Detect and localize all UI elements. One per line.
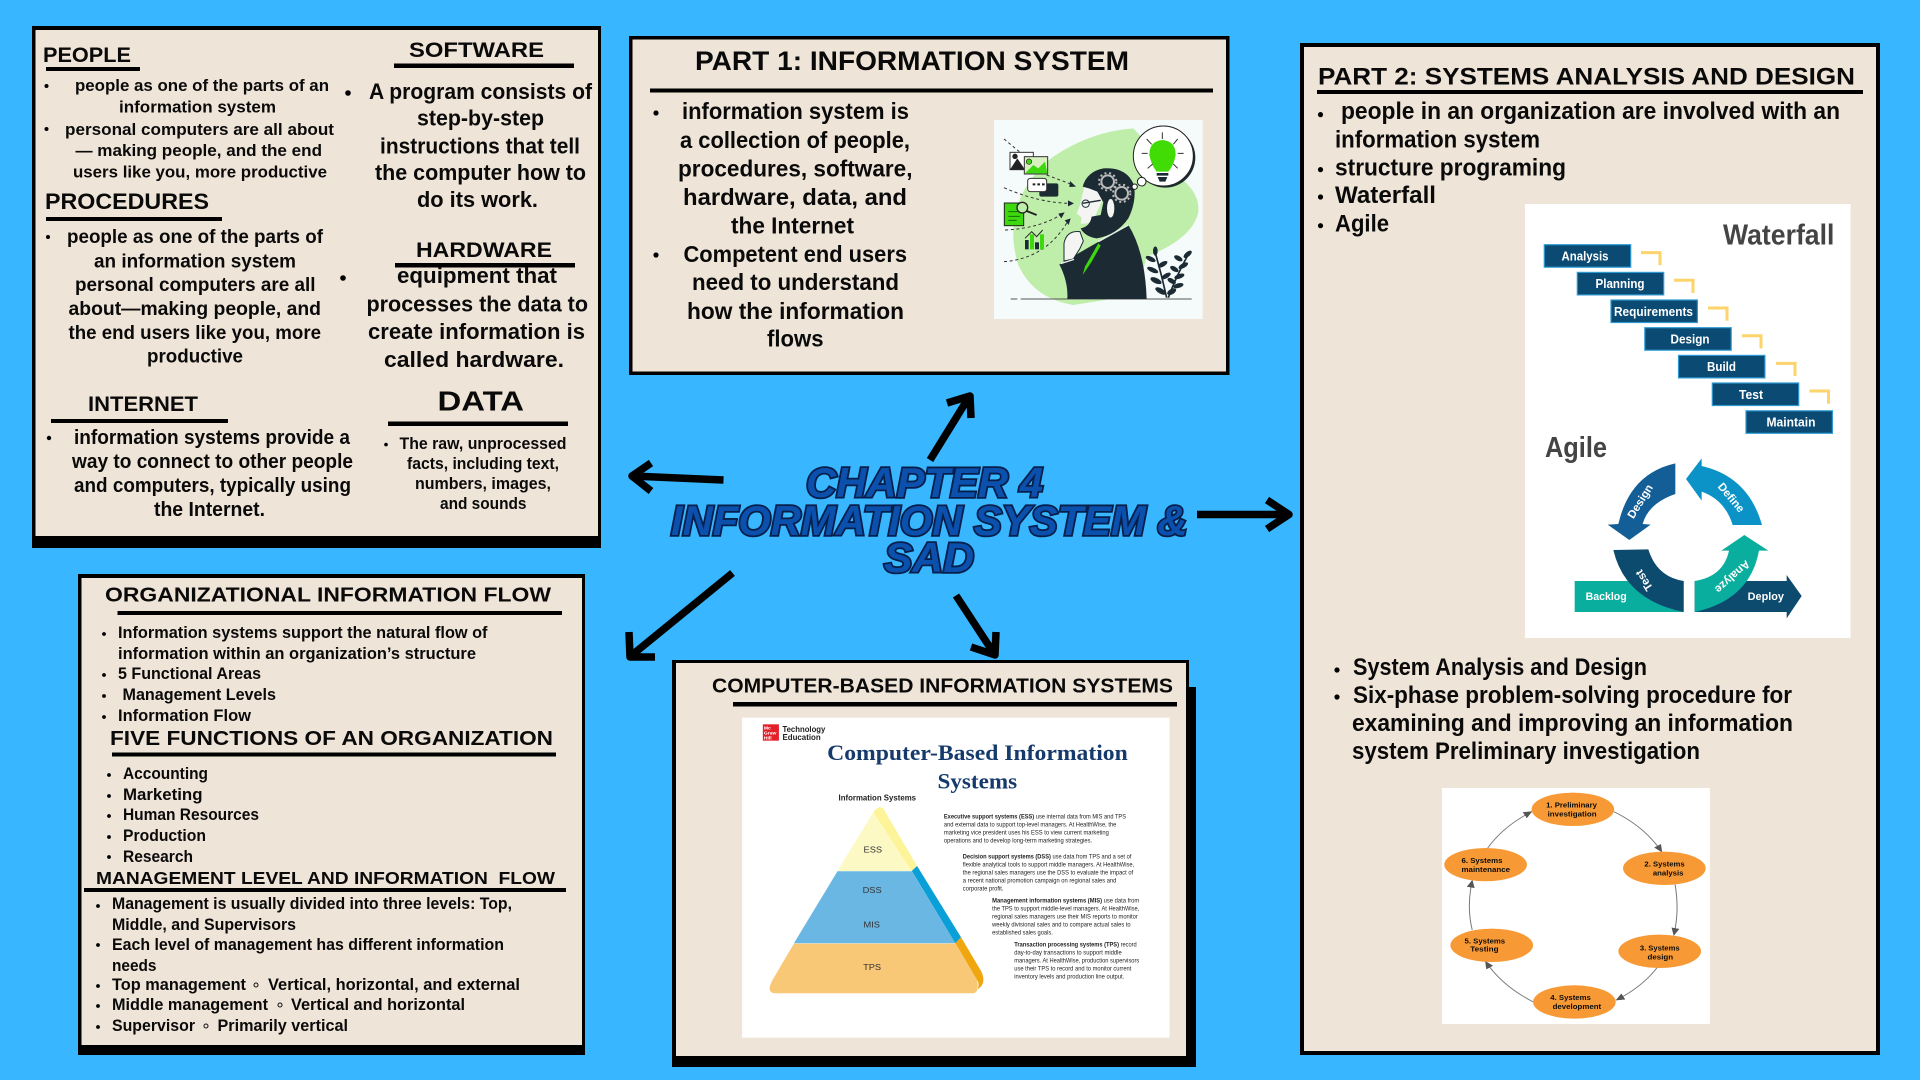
text block: part 2 bullets: information system: [1335, 126, 1540, 153]
text block: five functions list: Production: [123, 826, 206, 845]
text block: organizational flow bullets: Information systems support the natural flow of: [118, 623, 488, 642]
text block: internet: the Internet.: [154, 499, 265, 521]
text block: data: [384, 434, 566, 513]
pyramid chart: Information Systems: [839, 793, 916, 803]
text block: internet: way to connect to other people: [71, 451, 353, 473]
text block: procedures: people as one of the parts of: [67, 227, 324, 248]
arrow: down-right to computer-based systems: [956, 596, 996, 655]
text block: data: and sounds: [440, 494, 526, 513]
slide title: Systems: [937, 769, 1017, 793]
text block: part 1 bullets: the Internet: [731, 212, 854, 238]
text block: five functions list: Research: [123, 847, 193, 866]
text block: organizational flow bullets: 5 Functional Areas: [118, 664, 261, 683]
text block: management levels: Each level of management has different information: [112, 935, 504, 954]
diagram: six phase cycle: analysis: [1653, 869, 1684, 878]
text block: five functions list: Human Resources: [123, 805, 259, 824]
pyramid descriptions: regional sales managers use their MIS reports to monitor: [992, 913, 1139, 920]
text block: management levels: Vertical, horizontal, and external: [268, 975, 520, 994]
pyramid chart: MIS: [864, 920, 880, 930]
text block: people: information system: [119, 98, 276, 116]
waterfall diagram: Design: [1670, 332, 1710, 346]
heading: computer-based information systems: COMPUTER-BASED INFORMATION SYSTEMS: [712, 676, 1173, 698]
waterfall diagram: Maintain: [1766, 415, 1816, 430]
text block: software: step-by-step: [417, 106, 544, 131]
logo: technology education: Mc: [764, 725, 771, 731]
text block: procedures: about—making people, and: [68, 299, 321, 320]
text block: internet: [47, 427, 353, 521]
logo: technology education: Hill: [764, 735, 772, 741]
text block: procedures: an information system: [94, 252, 296, 272]
pyramid descriptions: managers. At HealthWise, production supervisors: [1014, 958, 1140, 965]
diagram: six phase cycle: investigation: [1548, 810, 1597, 818]
text block: management levels: Middle, and Supervisors: [112, 915, 296, 934]
text block: part 1 bullets: need to understand: [692, 269, 899, 295]
text block: part 1 bullets: [653, 98, 912, 352]
text block: five functions list: Accounting: [123, 764, 208, 783]
text block: people: — making people, and the end: [76, 141, 322, 160]
waterfall diagram: Requirements: [1614, 304, 1693, 319]
text block: software: A program consists of: [369, 79, 593, 104]
pyramid descriptions: the regional sales managers use the DSS to evaluate the impact of: [963, 869, 1133, 876]
text block: organizational flow bullets: [102, 623, 488, 725]
text block: system analysis and design: Six-phase problem-solving procedure for: [1353, 682, 1792, 709]
pyramid chart: [770, 793, 983, 993]
pyramid descriptions: Executive support systems (ESS) use internal data from MIS and TPS: [944, 813, 1127, 820]
slide title: Computer-Based Information: [827, 741, 1128, 765]
diagram: six phase cycle: design: [1647, 953, 1673, 961]
pyramid descriptions: inventory levels and production line output.: [1014, 974, 1124, 981]
pyramid descriptions: Transaction processing systems (TPS) record: [1014, 942, 1137, 949]
logo: technology education: Education: [782, 732, 821, 742]
text block: software: the computer how to: [375, 160, 586, 185]
text block: hardware: [340, 263, 588, 372]
logo: technology education: [763, 724, 826, 742]
text block: management levels: Supervisor: [112, 1016, 195, 1035]
text block: internet: information systems provide a: [74, 427, 351, 449]
text block: software: [345, 79, 593, 212]
text block: hardware: processes the data to: [366, 292, 588, 316]
text block: part 1 bullets: procedures, software,: [678, 156, 912, 182]
text block: management levels: [96, 894, 520, 1035]
text block: procedures: [46, 227, 324, 368]
heading: hardware: HARDWARE: [416, 239, 552, 262]
agile diagram: Define: [1715, 481, 1746, 515]
text block: part 1 bullets: how the information: [687, 298, 904, 324]
text block: software: instructions that tell: [380, 134, 580, 158]
heading: organizational information flow: [105, 584, 562, 615]
text block: people: [44, 76, 334, 182]
text block: part 2 bullets: people in an organization are involved with an: [1341, 98, 1840, 125]
diagram: waterfall and agile: [1525, 204, 1850, 638]
arrow: left to components panel: [632, 463, 724, 491]
main title: CHAPTER 4: [806, 459, 1043, 506]
text block: procedures: personal computers are all: [75, 275, 316, 296]
pyramid descriptions: marketing vice president uses his ESS to view current marketing: [944, 829, 1109, 836]
text block: management levels: Vertical and horizontal: [291, 995, 465, 1014]
text block: organizational flow bullets: Information Flow: [118, 706, 252, 725]
illustration: thinking man: [994, 120, 1203, 319]
text block: hardware: equipment that: [397, 263, 558, 288]
text block: system analysis and design: [1334, 654, 1793, 765]
logo: technology education: Graw: [764, 730, 777, 736]
arrow: right to part 2: [1197, 500, 1289, 529]
text block: procedures: productive: [147, 346, 243, 368]
text block: system analysis and design: system Preliminary investigation: [1352, 738, 1700, 765]
agile diagram: Analyze: [1712, 557, 1752, 595]
text block: part 2 bullets: Agile: [1335, 211, 1389, 238]
logo: technology education: Technology: [782, 724, 826, 734]
main title: [671, 459, 1188, 581]
pyramid descriptions: established sales goals.: [992, 929, 1053, 936]
agile diagram: Backlog: [1586, 591, 1627, 603]
pyramid descriptions: day-to-day transactions to support middle: [1014, 950, 1122, 957]
text block: people: personal computers are all about: [65, 120, 334, 139]
waterfall diagram: Build: [1707, 359, 1736, 374]
pyramid descriptions: [944, 813, 1140, 981]
arrow: down-left to organizational flow: [629, 573, 732, 657]
text block: management levels: needs: [112, 956, 156, 975]
text block: organizational flow bullets: information within an organization’s structure: [118, 644, 476, 663]
text block: part 2 bullets: [1318, 98, 1840, 238]
diagram: six phase cycle: [1442, 788, 1710, 1024]
heading: data: DATA: [438, 386, 524, 417]
text block: people: users like you, more productive: [73, 162, 327, 182]
arrow: up to part 1: [930, 396, 971, 460]
text block: part 2 bullets: Waterfall: [1335, 182, 1436, 209]
main title: INFORMATION SYSTEM &: [671, 497, 1188, 544]
text block: people: people as one of the parts of an: [75, 76, 329, 95]
pyramid descriptions: flexible analytical tools to support middle managers. At HealthWise,: [963, 861, 1134, 868]
waterfall diagram: Analysis: [1562, 248, 1608, 264]
text block: internet: and computers, typically using: [74, 475, 351, 497]
heading: software: [394, 39, 574, 68]
pyramid chart: TPS: [863, 962, 881, 972]
agile diagram: Design: [1626, 482, 1656, 521]
panel: components of an information system: [32, 26, 601, 548]
text block: system analysis and design: System Analysis and Design: [1353, 654, 1647, 681]
text block: management levels: Management is usually divided into three levels: Top,: [112, 894, 512, 913]
heading: five functions of an organization: FIVE FUNCTIONS OF AN ORGANIZATION: [110, 727, 553, 750]
heading: part 1: [650, 46, 1213, 92]
panel: computer-based information systems: [672, 660, 1196, 1067]
pyramid descriptions: Decision support systems (DSS) use data from TPS and a set of: [963, 853, 1132, 860]
agile diagram: Deploy: [1748, 591, 1785, 603]
text block: data: The raw, unprocessed: [400, 434, 566, 453]
text block: management levels: Top management: [112, 975, 246, 994]
pyramid descriptions: use their TPS to record and to monitor current: [1014, 966, 1132, 973]
text block: part 1 bullets: hardware, data, and: [683, 184, 907, 210]
diagram: six phase cycle: maintenance: [1461, 865, 1510, 874]
text block: part 2 bullets: structure programing: [1335, 154, 1566, 182]
text block: five functions list: [107, 764, 259, 866]
pyramid descriptions: a recent national promotion campaign on regional sales and: [963, 877, 1117, 884]
pyramid descriptions: Management information systems (MIS) use data from: [992, 897, 1140, 904]
pyramid descriptions: weekly divisional sales and to compare actual sales to: [991, 921, 1131, 928]
diagram: six phase cycle: development: [1553, 1002, 1601, 1011]
pyramid chart: ESS: [864, 845, 882, 855]
text block: data: numbers, images,: [415, 474, 551, 493]
heading: organizational information flow: ORGANIZATIONAL INFORMATION FLOW: [105, 584, 552, 607]
heading: software: SOFTWARE: [409, 39, 544, 62]
text block: procedures: the end users like you, more: [68, 323, 321, 344]
agile diagram: Agile: [1545, 432, 1607, 464]
diagram: six phase cycle: 4. Systems: [1550, 993, 1591, 1002]
pyramid descriptions: and external data to support top-level managers. At HealthWise, the: [944, 821, 1117, 828]
slide title: [827, 741, 1128, 793]
text block: part 1 bullets: a collection of people,: [680, 127, 910, 153]
heading: management level and information flow: MANAGEMENT LEVEL AND INFORMATION FLOW: [96, 868, 556, 888]
text block: management levels: Middle management: [112, 995, 268, 1014]
waterfall diagram: [1544, 219, 1834, 433]
diagram: six phase cycle: 3. Systems: [1640, 944, 1680, 952]
text block: software: do its work.: [417, 187, 538, 212]
heading: part 1: PART 1: INFORMATION SYSTEM: [695, 46, 1129, 76]
heading: people: PEOPLE: [43, 44, 131, 67]
text block: system analysis and design: examining and improving an information: [1352, 710, 1793, 737]
diagram: six phase cycle: 1. Preliminary: [1546, 801, 1597, 809]
pyramid chart: DSS: [863, 885, 882, 895]
panel: organizational information flow: [78, 574, 585, 1055]
agile diagram: Test: [1634, 567, 1656, 593]
heading: procedures: [45, 189, 222, 221]
heading: hardware: [395, 239, 575, 268]
text block: part 1 bullets: flows: [767, 326, 824, 352]
pyramid descriptions: the TPS to support middle-level managers. At HealthWise,: [992, 905, 1139, 912]
text block: part 1 bullets: information system is: [682, 98, 909, 124]
text block: data: facts, including text,: [407, 454, 559, 473]
text block: organizational flow bullets: Management Levels: [122, 685, 276, 704]
diagram: six phase cycle: Testing: [1470, 945, 1499, 953]
heading: part 2: PART 2: SYSTEMS ANALYSIS AND DESIGN: [1318, 64, 1855, 91]
waterfall diagram: Test: [1739, 387, 1764, 402]
text block: part 1 bullets: Competent end users: [684, 241, 907, 267]
pyramid descriptions: corporate profit.: [963, 885, 1004, 892]
heading: data: [388, 386, 568, 426]
pyramid descriptions: operations and to develop long-term marketing strategies.: [944, 837, 1092, 844]
text block: management levels: Primarily vertical: [218, 1016, 348, 1035]
main title: SAD: [884, 534, 974, 581]
diagram: six phase cycle: 6. Systems: [1461, 856, 1503, 865]
slide: information systems pyramid: [742, 718, 1170, 1038]
waterfall diagram: Waterfall: [1723, 219, 1834, 251]
panel: part 1 information system: [629, 36, 1230, 375]
text block: hardware: called hardware.: [384, 347, 564, 372]
heading: internet: INTERNET: [88, 393, 198, 416]
diagram: six phase cycle: 5. Systems: [1465, 937, 1506, 945]
heading: computer-based information systems: [712, 676, 1177, 706]
diagram: six phase cycle: 2. Systems: [1644, 860, 1685, 869]
panel: part 2 systems analysis and design: [1300, 43, 1880, 1055]
waterfall diagram: Planning: [1596, 276, 1645, 291]
text block: hardware: create information is: [368, 319, 585, 344]
agile diagram: [1545, 432, 1802, 618]
text block: five functions list: Marketing: [123, 785, 202, 804]
heading: procedures: PROCEDURES: [45, 189, 209, 214]
heading: internet: [51, 393, 228, 423]
